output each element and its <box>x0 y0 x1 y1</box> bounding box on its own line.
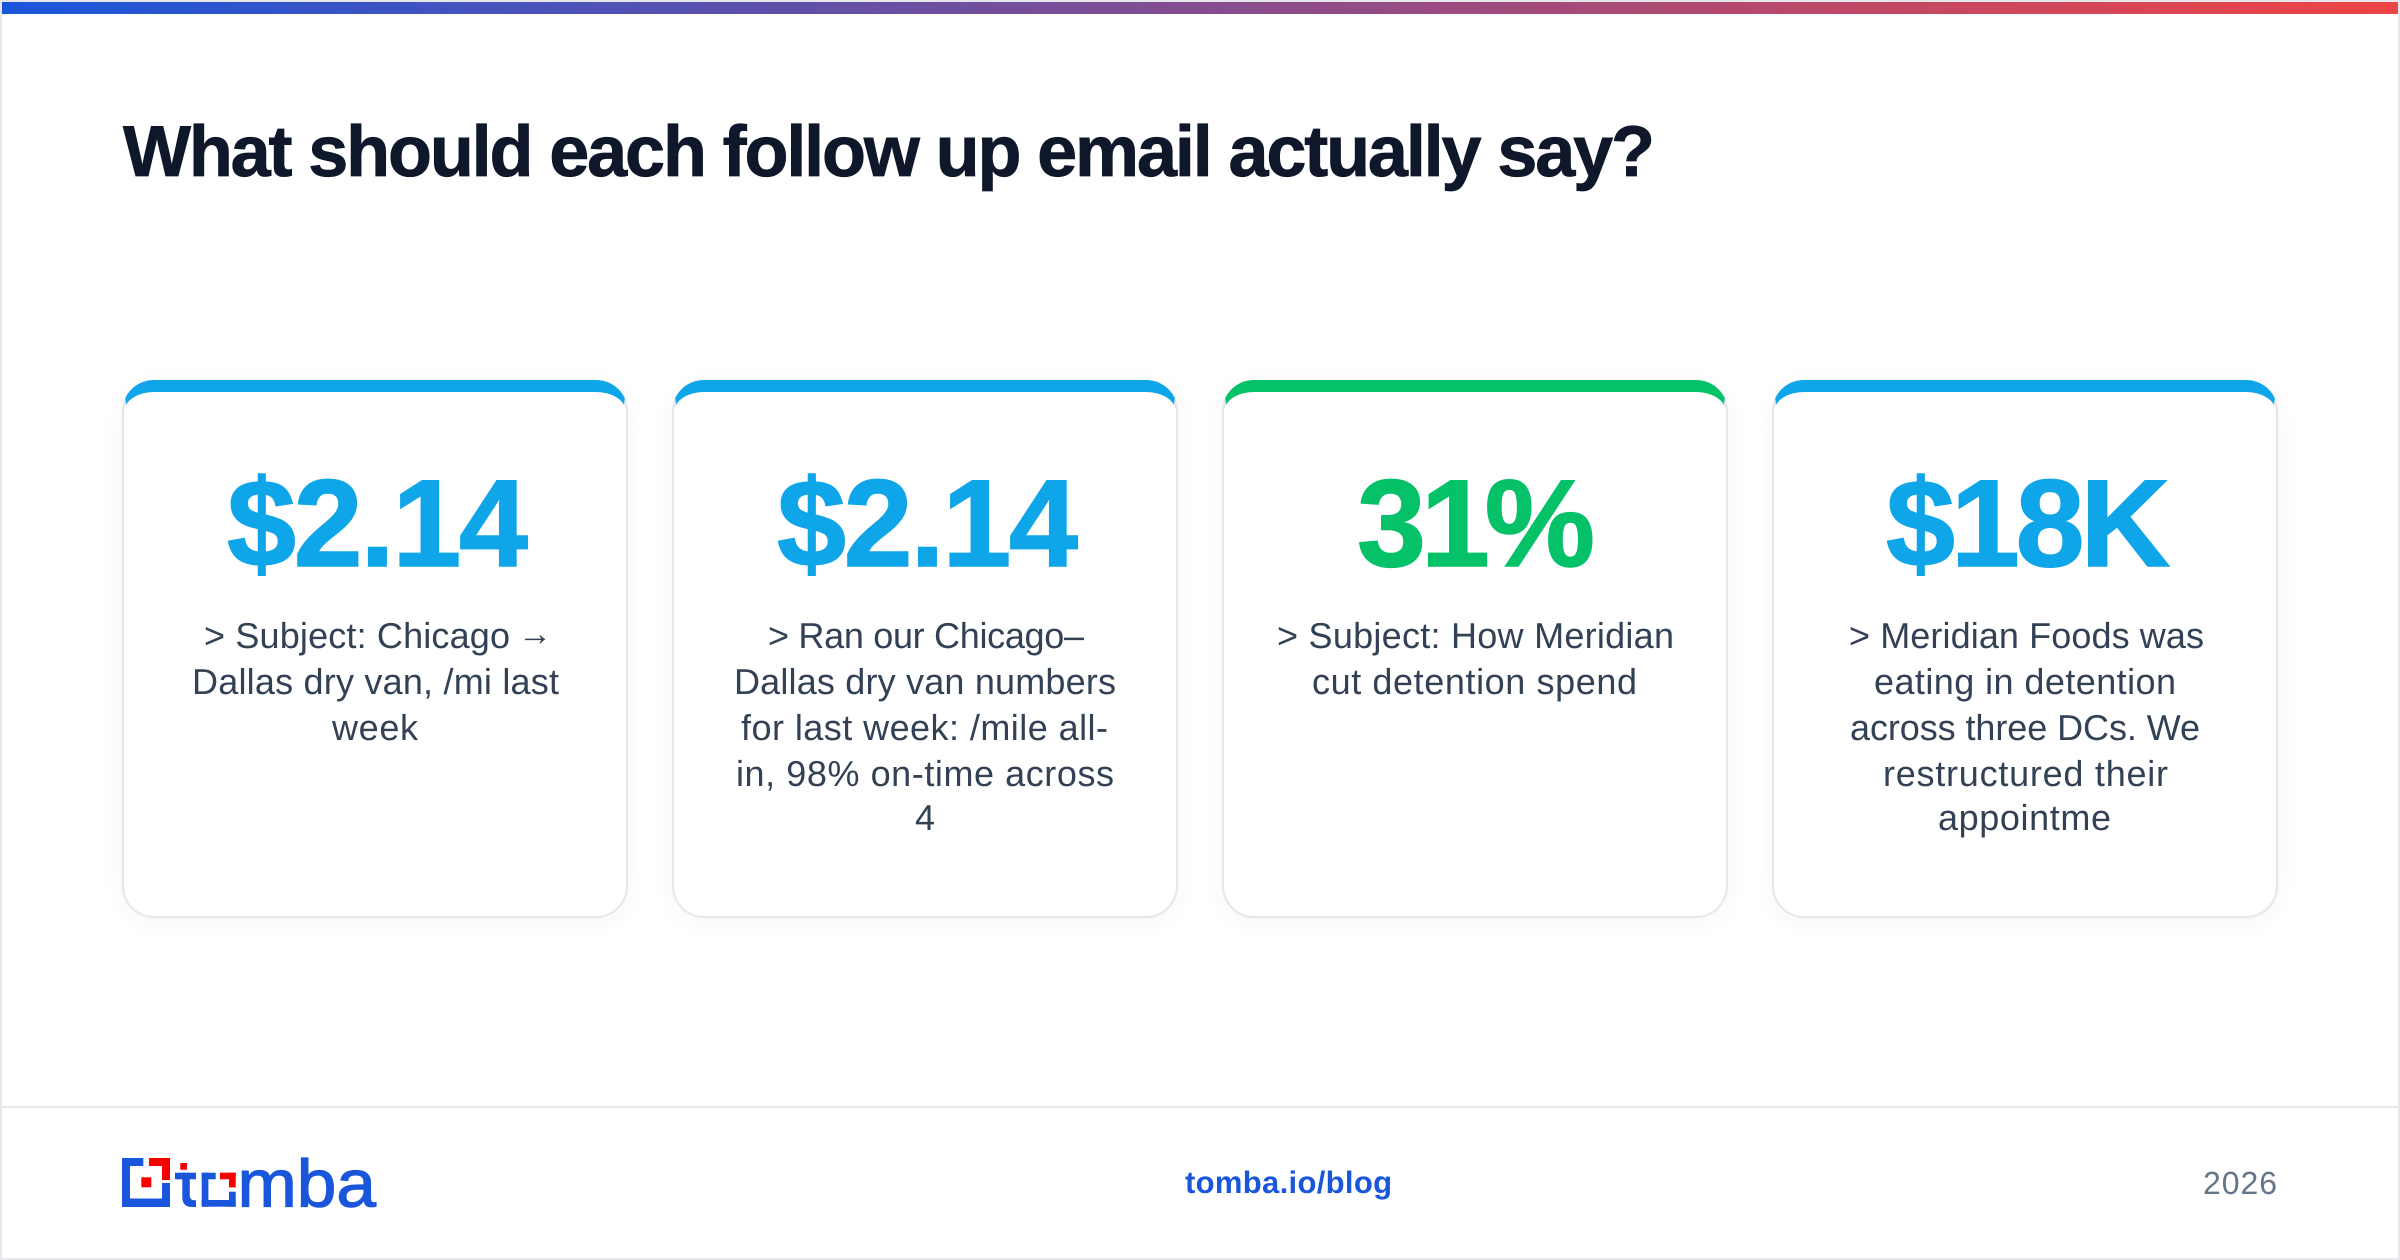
stat: $18K: $18K <box>1886 455 2170 593</box>
panel: card 4 <box>1772 380 2278 918</box>
body text: card 4: appointme <box>1938 797 2111 838</box>
top gradient bar <box>2 2 2398 14</box>
panel: card 3 <box>1222 380 1728 918</box>
panel: card 2 <box>672 380 1178 918</box>
body text: card 1: week <box>331 707 419 748</box>
stat: $2.14: $2.14 <box>777 455 1078 593</box>
logo wordmark: mba <box>238 1146 377 1222</box>
body text: card 2: > Ran our Chicago– <box>768 615 1084 656</box>
panel: card 1 <box>122 380 628 918</box>
body text: card 3: > Subject: How Meridian <box>1277 615 1674 656</box>
body text: card 2: 4 <box>915 797 935 838</box>
body text: card 2 <box>734 615 1116 838</box>
footer year: 2026 <box>2203 1165 2277 1201</box>
body text: card 2: in, 98% on-time across <box>736 753 1114 794</box>
body text: card 4 <box>1849 615 2204 838</box>
body text: card 4: > Meridian Foods was <box>1849 615 2204 656</box>
body text: card 1: > Subject: Chicago <box>204 615 510 656</box>
logo letter t <box>175 1163 196 1207</box>
stat: $2.14: $2.14 <box>227 455 528 593</box>
body text: card 4: eating in detention <box>1874 661 2176 702</box>
logo square o <box>202 1173 236 1207</box>
body text: card 1: Dallas dry van, /mi last <box>192 661 559 702</box>
body text: card 2: Dallas dry van numbers <box>734 661 1116 702</box>
body text: card 3 <box>1277 615 1674 702</box>
body text: card 1: → <box>518 615 552 653</box>
body text: card 1 <box>192 615 559 748</box>
icon: logo square <box>122 1158 170 1207</box>
body text: card 4: restructured their <box>1883 753 2168 794</box>
body text: card 4: across three DCs. We <box>1850 707 2200 748</box>
stat: 31%: 31% <box>1357 455 1595 593</box>
title: What should each follow up email actually say? <box>123 112 1655 192</box>
logo: tomba <box>122 1146 377 1222</box>
footer link: tomba.io/blog <box>1185 1165 1392 1200</box>
body text: card 3: cut detention spend <box>1312 661 1637 702</box>
body text: card 2: for last week: /mile all- <box>741 707 1108 748</box>
